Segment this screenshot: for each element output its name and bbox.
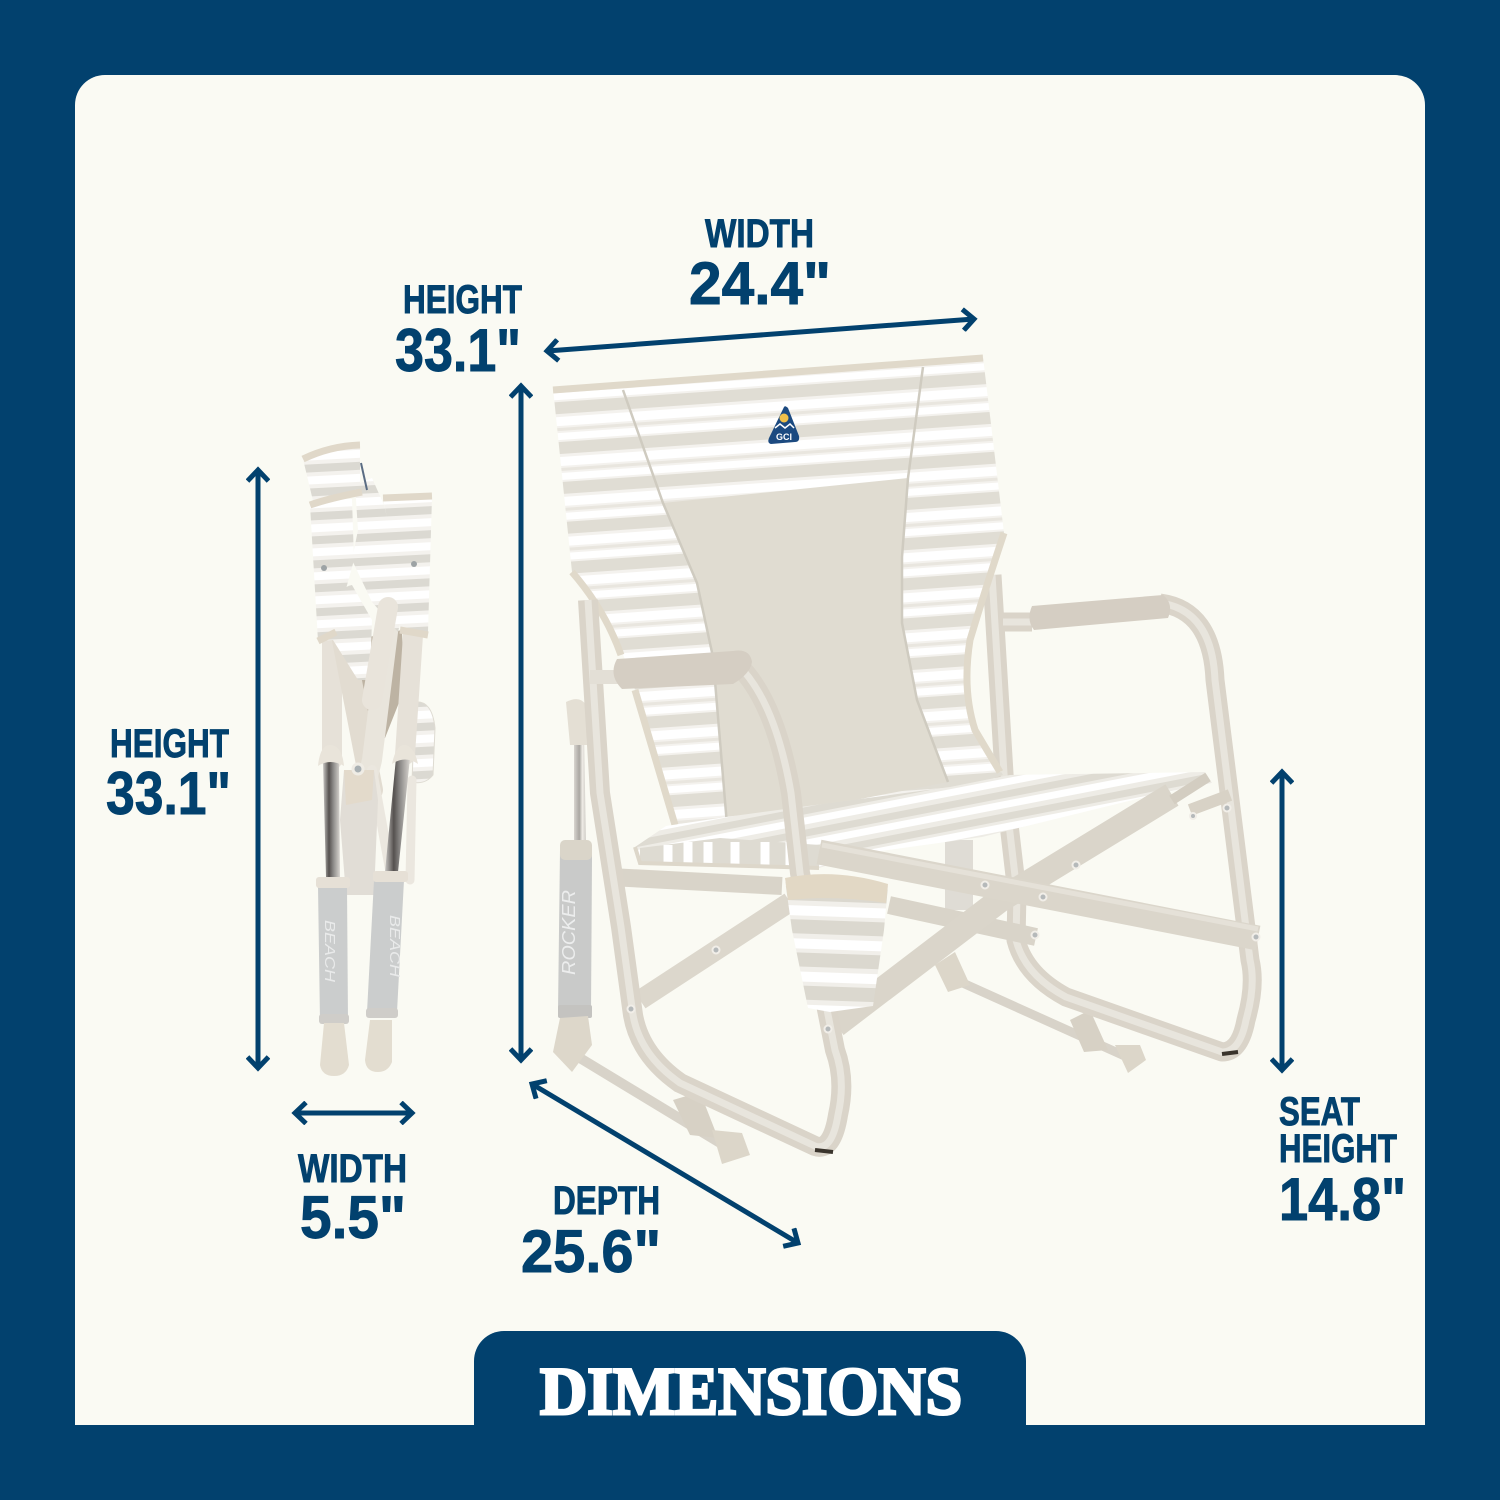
label: seat height 14.8 <box>1279 1090 1406 1233</box>
back fabric: seams <box>623 367 948 825</box>
frame lower bolts <box>628 1006 832 1032</box>
folded chair sleeve: right <box>367 880 404 1012</box>
rocker sleeve: ROCKER <box>559 890 579 975</box>
near armrest pad <box>613 650 752 689</box>
arrow: top width <box>547 319 974 351</box>
folded chair inner shadow <box>355 630 404 738</box>
arrow: folded width <box>295 1110 412 1116</box>
label: seat height 14.8: SEAT <box>1279 1090 1360 1134</box>
icon: GCI logo <box>768 406 799 444</box>
folded chair cup holder <box>412 702 435 783</box>
title: DIMENSIONS <box>540 1353 962 1429</box>
label: width 24.4: WIDTH <box>705 212 814 256</box>
far frame tube and rocker <box>992 575 1252 1052</box>
cup holder <box>785 874 888 1012</box>
label: height 33.1: 33.1" <box>395 317 521 384</box>
folded chair rivets <box>321 565 327 571</box>
folded chair feet <box>320 1023 349 1076</box>
near rail <box>553 1016 750 1164</box>
label: folded width 5.5: WIDTH <box>298 1147 407 1191</box>
label: folded width 5.5 <box>298 1147 407 1251</box>
back fabric: beige center panel <box>663 478 948 825</box>
illustration: folded chair: BEACH <box>321 920 338 982</box>
bolts <box>612 804 1260 954</box>
title tab <box>474 1331 1026 1429</box>
label: folded width 5.5: 5.5" <box>300 1184 406 1251</box>
label: height 33.1 <box>395 278 522 384</box>
far armrest pad <box>1029 595 1170 630</box>
label: folded height 33.1: 33.1" <box>106 760 231 827</box>
arrow: height <box>518 386 524 1060</box>
arrow: seat height <box>1280 772 1284 1070</box>
arrow: folded height <box>256 470 260 1068</box>
label: width 24.4 <box>689 212 831 317</box>
rocker sleeve <box>558 699 592 1018</box>
near frame tube and rocker <box>588 600 841 1147</box>
illustration: rocking chair <box>553 357 1260 1164</box>
icon: GCI logo: GCI <box>776 432 792 442</box>
rocker base shadow points <box>815 1052 1238 1152</box>
label: seat height 14.8: HEIGHT <box>1279 1127 1397 1171</box>
folded chair strap <box>340 770 378 895</box>
back of chair fabric <box>553 357 1004 825</box>
illustration: folded chair <box>303 445 435 1076</box>
back fabric: striped <box>553 357 1004 825</box>
folded chair fabric <box>310 499 354 641</box>
label: depth 25.6: 25.6" <box>521 1218 661 1285</box>
label: depth 25.6 <box>521 1179 661 1285</box>
back fabric: hem <box>553 358 1004 825</box>
folded chair chrome rods <box>323 762 340 877</box>
folded chair hems <box>303 445 432 641</box>
folded chair sleeve: left <box>318 886 348 1022</box>
far rail <box>935 952 1146 1073</box>
label: width 24.4: 24.4" <box>689 250 831 317</box>
arrow: depth <box>532 1084 798 1243</box>
label: seat height 14.8: 14.8" <box>1279 1166 1406 1233</box>
folded chair tubes <box>332 600 414 880</box>
illustration: folded chair: BEACH <box>386 915 403 977</box>
label: folded height 33.1: HEIGHT <box>110 722 229 766</box>
lower frame bars <box>610 777 1258 1025</box>
label: depth 25.6: DEPTH <box>553 1179 660 1223</box>
label: height 33.1: HEIGHT <box>403 278 522 322</box>
center post <box>945 840 973 910</box>
label: folded height 33.1 <box>106 722 231 827</box>
seat fabric <box>635 772 1212 868</box>
